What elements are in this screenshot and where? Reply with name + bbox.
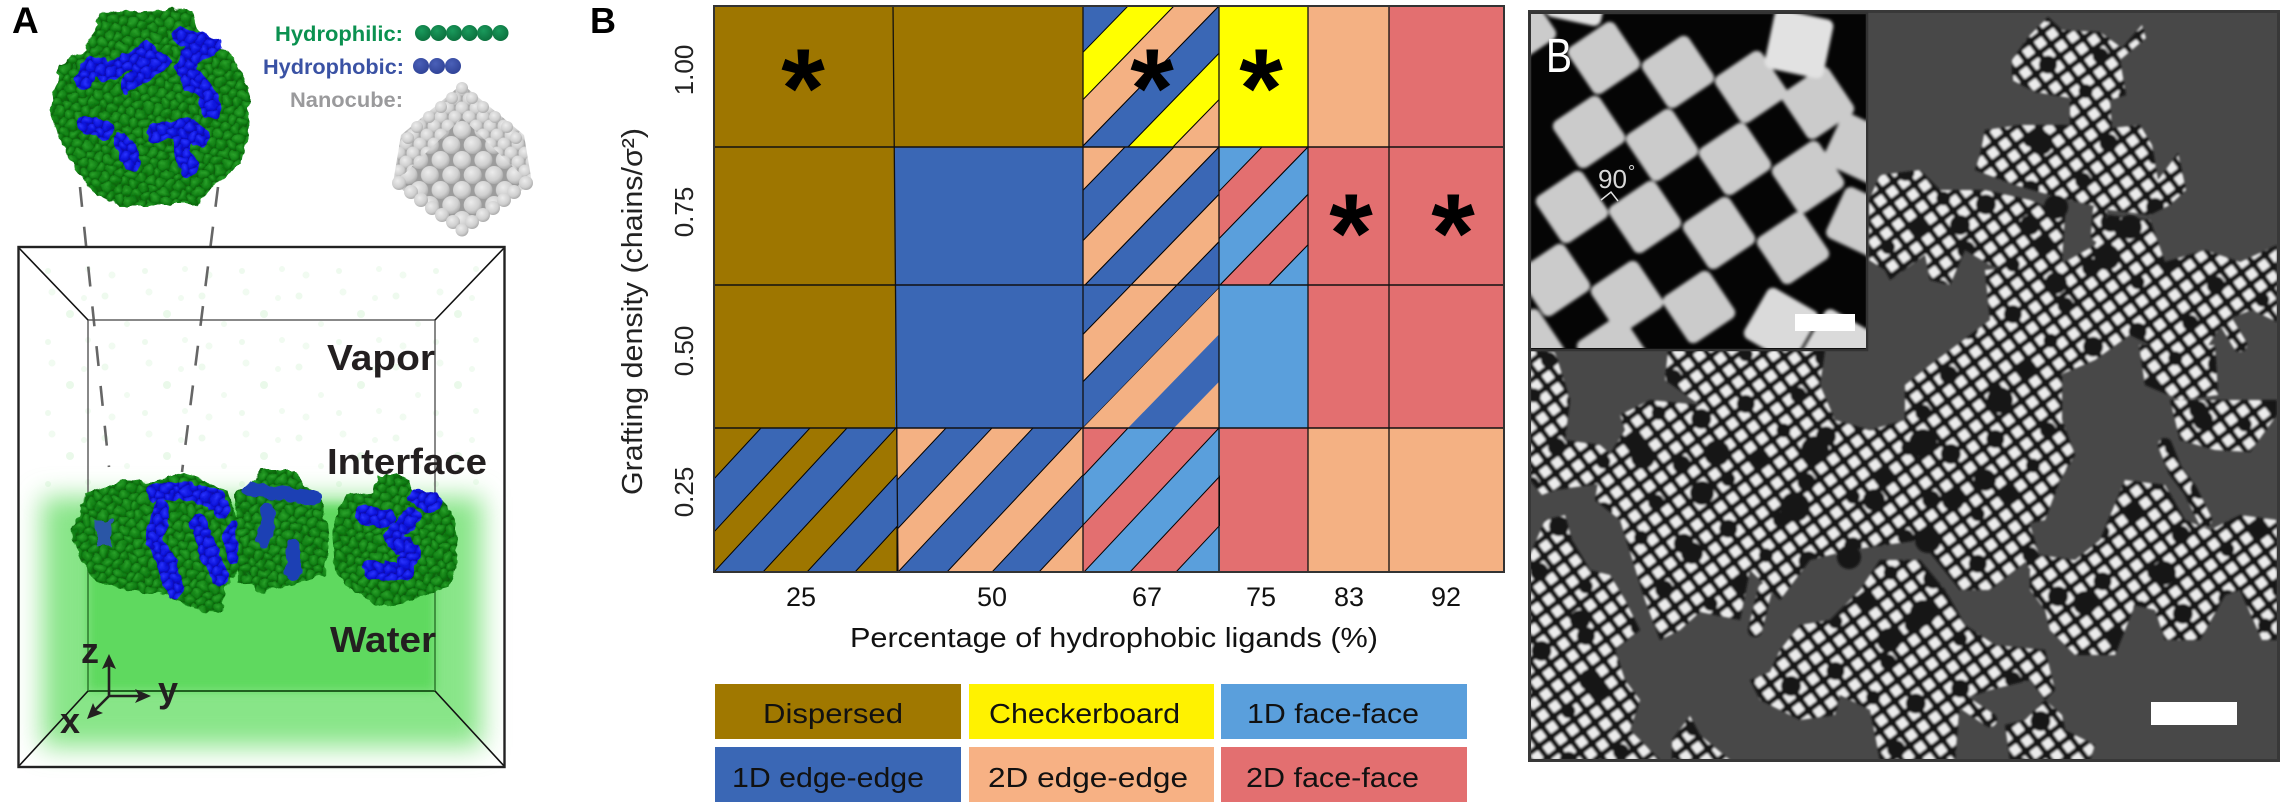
cluster two xyxy=(235,470,328,592)
scale bar xyxy=(2151,702,2237,725)
phase label: Water: Water xyxy=(330,619,436,660)
inset micrograph xyxy=(1531,13,1868,352)
y-axis tick labels: 0.50 xyxy=(669,326,699,376)
y-axis title: Grafting density (chains/σ²) xyxy=(617,128,649,495)
legend item: 2D edge-edge xyxy=(969,747,1214,802)
asterisks marking experimental matches: * xyxy=(781,26,825,151)
vapor particles xyxy=(40,262,485,490)
asterisks marking experimental matches: * xyxy=(1431,171,1475,296)
legend item: 2D face-face: 2D face-face xyxy=(1246,762,1419,793)
checkerboard nanocubes xyxy=(1531,14,1866,348)
striped cell: 50%, 0.25 xyxy=(897,428,1082,571)
striped cell: 67%, 0.75 xyxy=(1084,148,1218,284)
x-axis tick labels: 75 xyxy=(1246,582,1276,612)
ligand-grafted nanocube close-up xyxy=(50,10,250,205)
legend item: 1D edge-edge: 1D edge-edge xyxy=(732,762,924,793)
x-axis title: Percentage of hydrophobic ligands (%) xyxy=(850,622,1378,653)
striped cell: 75%, 0.75 xyxy=(1220,148,1308,284)
legend: hydrophilic xyxy=(275,23,508,46)
legend item: dispersed: Dispersed xyxy=(763,698,903,729)
striped cell: 25%, 0.25 xyxy=(715,428,897,571)
angle annotation 90 degrees: ° xyxy=(1628,162,1635,182)
panel C: electron micrograph xyxy=(1481,0,2278,760)
x-axis tick labels: 67 xyxy=(1132,582,1162,612)
striped cell: 67%, 0.25 xyxy=(1084,428,1220,571)
legend item: checkerboard xyxy=(969,684,1214,739)
axes: z xyxy=(81,630,99,671)
legend item: 1D edge-edge xyxy=(715,747,961,802)
striped cell: 67%, 1.00 xyxy=(1084,7,1218,146)
legend: hydrophobic xyxy=(263,56,461,79)
legend: hydrophobic: Hydrophobic: xyxy=(263,56,404,79)
heatmap cells xyxy=(628,6,1504,572)
striped cell: 67%, 0.50 xyxy=(1084,286,1218,428)
inset scale bar xyxy=(1795,314,1855,331)
y-axis tick labels xyxy=(669,45,699,517)
angle annotation 90 degrees xyxy=(1598,162,1635,201)
simulation box xyxy=(18,247,505,767)
cluster three xyxy=(332,476,458,606)
legend: nanocube label: Nanocube: xyxy=(290,89,403,112)
phase label: Vapor: Vapor xyxy=(327,337,435,378)
asterisks marking experimental matches: * xyxy=(1329,171,1373,296)
icon: nanocube of spheres xyxy=(392,82,533,236)
legend item: dispersed xyxy=(715,684,961,739)
cluster one xyxy=(73,472,243,612)
zoom guide dashed lines xyxy=(80,187,218,472)
legend: hydrophilic: Hydrophilic: xyxy=(275,23,403,46)
axes: y xyxy=(158,669,178,710)
axes xyxy=(60,630,178,741)
y-axis tick labels: 0.75 xyxy=(669,187,699,237)
panel A: simulation xyxy=(12,0,533,767)
angle annotation 90 degrees: 90 xyxy=(1598,164,1627,194)
inset label B: B xyxy=(1546,30,1572,83)
legend: phases xyxy=(715,684,1467,802)
panel label A: A xyxy=(12,0,39,41)
nanocube clusters at interface xyxy=(73,470,458,612)
asterisks marking experimental matches: * xyxy=(1239,26,1283,151)
x-axis tick labels: 83 xyxy=(1334,582,1364,612)
y-axis tick labels: 0.25 xyxy=(669,467,699,517)
legend item: 1D face-face xyxy=(1221,684,1467,739)
micrograph background xyxy=(1530,12,2278,760)
x-axis tick labels: 25 xyxy=(786,582,816,612)
x-axis tick labels: 50 xyxy=(977,582,1007,612)
legend item: 2D face-face xyxy=(1221,747,1467,802)
asterisks marking experimental matches xyxy=(781,26,1475,296)
water phase xyxy=(42,497,482,747)
panel label B: B xyxy=(590,0,616,41)
legend item: checkerboard: Checkerboard xyxy=(989,698,1180,729)
legend item: 2D edge-edge: 2D edge-edge xyxy=(988,762,1188,793)
x-axis tick labels: 92 xyxy=(1431,582,1461,612)
axes: x xyxy=(60,700,80,741)
nanocube network xyxy=(1530,17,2277,760)
x-axis tick labels xyxy=(786,582,1461,612)
legend item: 1D face-face: 1D face-face xyxy=(1247,698,1419,729)
y-axis tick labels: 1.00 xyxy=(669,45,699,95)
panel B: phase diagram xyxy=(590,0,1504,802)
phase label: Interface: Interface xyxy=(327,441,487,482)
asterisks marking experimental matches: * xyxy=(1130,26,1174,151)
